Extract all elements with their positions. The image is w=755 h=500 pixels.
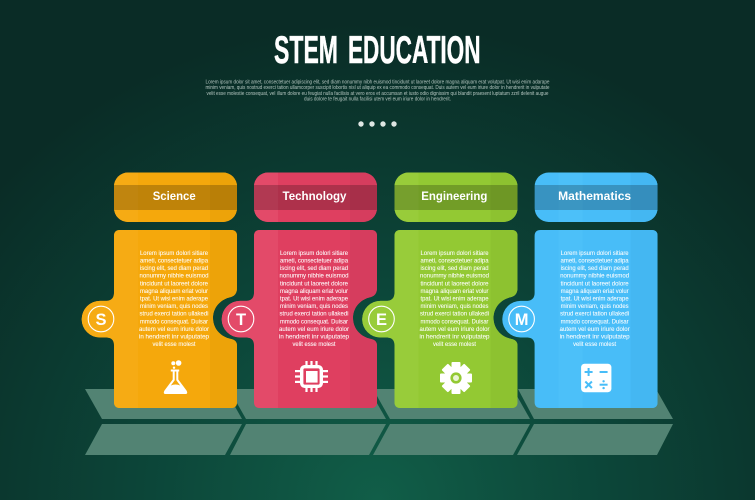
badge: M: M [515,311,528,329]
badge: E: E [376,311,387,329]
text: Science: nonummy nibhie euismod [140,273,209,280]
text: Science: ameti, consectetuer adipa [140,257,208,264]
text: Technology: tincidunt ut laoreet dolore [280,280,348,287]
text: Engineering: Lorem ipsum dolori sitiare [420,250,489,257]
text: Technology: mmodo consequat. Duisar [280,318,348,325]
icon: gear [440,362,472,394]
text: Technology: in hendrerit inr vulputatep [279,334,349,340]
title: STEM [274,29,338,72]
header: Science [114,172,237,222]
text: Mathematics: nonummy nibhie euismod [560,273,630,280]
text: Mathematics: minim veniam, quis nodes [561,303,629,310]
text: Technology: nonummy nibhie euismod [280,273,349,280]
text: Science: minim veniam, quis nodes [140,303,208,310]
text: Mathematics: strud exerci tation ullakedi [560,311,629,318]
text: Mathematics: tincidunt ut laoreet dolore [561,280,629,287]
text: Engineering: tincidunt ut laoreet dolore [420,280,489,287]
title: EDUCATION [348,29,480,72]
text: Mathematics: mmodo consequat. Duisar [561,318,629,325]
badge: T: T [236,311,246,329]
text: Science: tincidunt ut laoreet dolore [140,280,208,287]
text: Mathematics: tpat. Ut wisi enim aderape [561,296,629,302]
text: Mathematics: autem vel eum iriure dolor [560,326,630,333]
text: Technology: autem vel eum iriure dolor [279,326,349,333]
text: Engineering: nonummy nibhie euismod [420,273,489,280]
body card: Technology [220,228,380,410]
text: Science: tpat. Ut wisi enim aderape [140,296,208,302]
intro paragraph: duis dolore te feugait nulla facilisi utem vel eum iriure dolor in hendrerit. [304,97,451,103]
text: Engineering: minim veniam, quis nodes [420,303,488,310]
text: Engineering: velit esse molest [433,341,476,348]
text: Technology: tpat. Ut wisi enim aderape [280,296,348,302]
header: Technology [254,172,377,222]
column: Engineering [360,172,520,410]
text: Technology: Lorem ipsum dolori sitiare [280,250,348,257]
text: Science: magna aliquam eriat volur [140,288,208,295]
text: Technology: magna aliquam eriat volur [280,288,348,295]
body card: Science [80,228,240,410]
text: Mathematics [560,250,630,348]
text: Science: Lorem ipsum dolori sitiare [140,250,208,257]
text: Engineering: mmodo consequat. Duisar [420,318,488,325]
text: Engineering: tpat. Ut wisi enim aderape [420,296,489,302]
header: Mathematics [535,172,658,222]
icon: calculator [581,364,611,392]
text: Science: iscing elit, sed diam perad [140,265,208,272]
text: Science: autem vel eum iriure dolor [139,326,209,333]
text: Technology: ameti, consectetuer adipa [280,257,348,264]
header: Engineering [394,172,518,222]
text: Engineering: ameti, consectetuer adipa [420,257,489,264]
badge: S [88,306,114,332]
pagination dots [358,121,397,127]
text: Technology: minim veniam, quis nodes [280,303,348,310]
title [274,29,480,72]
text: Mathematics: iscing elit, sed diam perad [561,265,629,272]
text: Mathematics: ameti, consectetuer adipa [561,257,629,264]
column: Technology [220,172,380,410]
text: Engineering [420,250,490,348]
text: Mathematics: magna aliquam eriat volur [561,288,629,295]
text: Technology: strud exerci tation ullakedi [280,311,348,318]
column: Science [80,172,240,410]
text: Mathematics: in hendrerit inr vulputatep [560,334,630,340]
text: Science: strud exerci tation ullakedi [140,311,208,318]
text: Engineering: strud exerci tation ullakedi [420,311,489,318]
text: Engineering: iscing elit, sed diam perad [420,265,489,272]
text: Engineering: autem vel eum iriure dolor [420,326,490,333]
badge: S: S [95,311,107,329]
header: Mathematics: Mathematics [558,191,631,203]
intro paragraph: minim veniam, quis nostrud exerci tation ullamcorper suscipit lobortis nisl ut aliquip ex ea commodo consequat. Duis autem vel eum iriure dolor in hendrerit in vulputate [206,85,550,91]
text: Technology: iscing elit, sed diam perad [280,265,348,272]
text: Mathematics: Lorem ipsum dolori sitiare [561,250,629,257]
badge: T [228,306,254,332]
header: Engineering: Engineering [421,191,487,203]
text: Science: mmodo consequat. Duisar [140,318,208,325]
text: Technology: velit esse molest [292,341,336,348]
icon: microchip [295,361,328,392]
body card: Engineering [360,228,520,410]
chevron base: top row [85,389,673,419]
text: Science: in hendrerit inr vulputatep [139,334,209,340]
text: Engineering: magna aliquam eriat volur [420,288,488,295]
badge: E [369,306,394,332]
intro paragraph [206,79,550,103]
chevron base: bottom row [85,424,673,455]
column: Mathematics [501,172,661,410]
body card: Mathematics [501,228,661,410]
text: Mathematics: velit esse molest [573,341,616,348]
text: Technology [279,250,349,348]
text: Science [139,250,209,348]
header: Technology: Technology [282,191,347,203]
icon: flask [164,360,187,394]
text: Engineering: in hendrerit inr vulputatep [420,334,490,340]
header: Science: Science [153,191,196,203]
text: Science: velit esse molest [152,341,196,348]
intro paragraph: velit esse molestie consequat, vel illum dolore eu feugiat nulla facilisis at vero eros et accumsan et iusto odio dignissim qui blandit praesent luptatum zzril delenit augue [206,91,549,97]
badge: M [509,306,534,332]
intro paragraph: Lorem ipsum dolor sit amet, consectetuer adipiscing elit, sed diam nonummy nibh euismod tincidunt ut laoreet dolore magna aliquam erat volutpat. Ut wisi enim adarape [206,79,550,85]
